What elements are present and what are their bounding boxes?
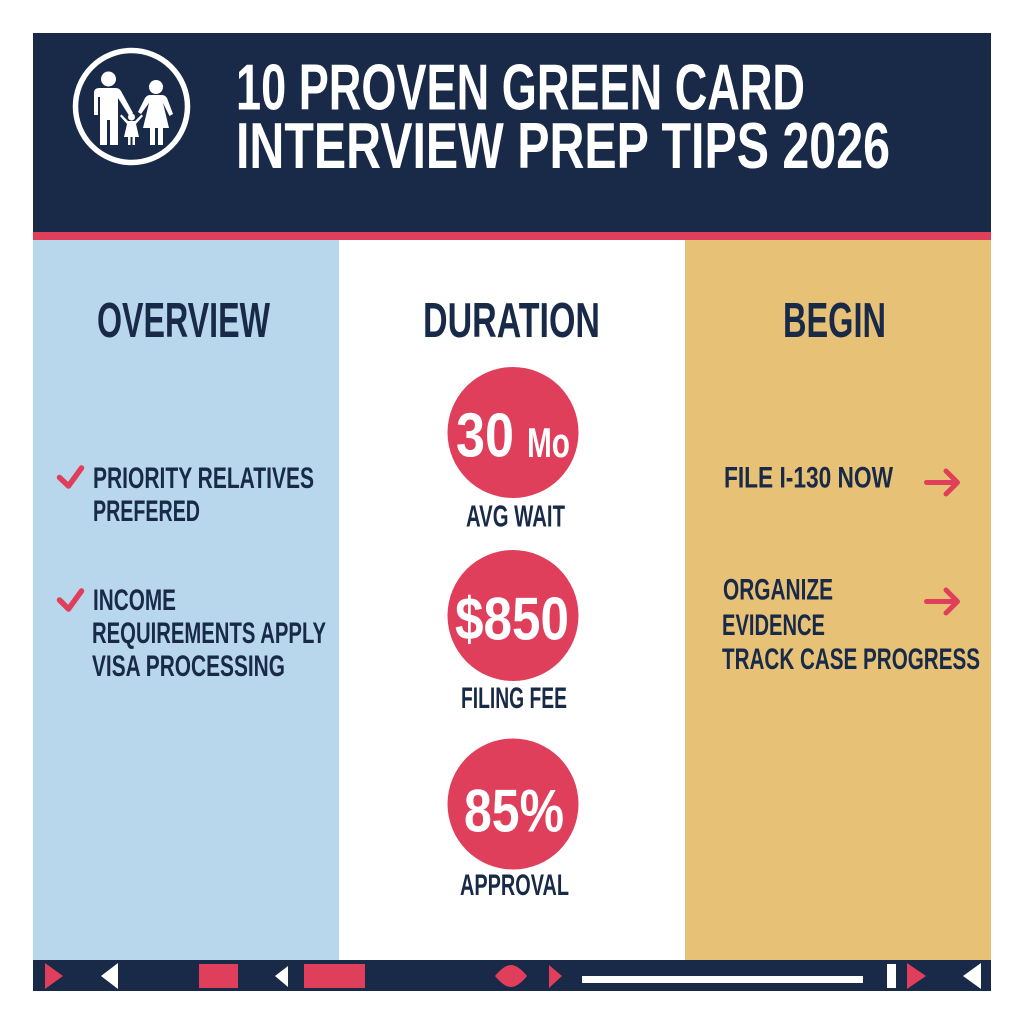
text: income requirements: REQUIREMENTS APPLY [92,617,326,650]
stat: average wait [448,367,578,534]
icon: check mark 2 [60,591,82,609]
icon: check mark 1 [60,468,82,486]
footer shapes [45,963,981,989]
heading: duration: DURATION [423,294,600,348]
text: organize evidence: ORGANIZE [723,574,833,606]
heading: begin: BEGIN [783,294,886,348]
icon: family in circle [76,50,188,162]
footer bar [33,960,991,991]
text: priority relatives: PRIORITY RELATIVES [93,462,314,495]
text: organize evidence [722,574,980,676]
text: income requirements: VISA PROCESSING [92,650,285,683]
stat: average wait: AVG WAIT [466,498,565,534]
text: priority relatives [93,462,314,528]
stat: filing fee [448,550,578,715]
text: income requirements [92,584,326,683]
text: organize evidence: EVIDENCE [722,609,825,642]
stat: average wait: Mo [527,419,570,466]
stat: filing fee: FILING FEE [461,682,567,715]
stat: approval: APPROVAL [460,869,569,902]
arrow 1 [926,471,958,494]
header banner [33,33,991,240]
stat: approval [448,738,578,902]
arrow 2 [926,590,958,613]
heading: overview: OVERVIEW [97,294,270,348]
panel: begin [685,240,991,960]
panel: duration [339,240,685,960]
text: priority relatives: PREFERED [93,495,200,528]
stat: filing fee: $850 [455,586,569,652]
text: income requirements: INCOME [93,584,176,617]
stat: average wait: 30 [456,402,514,470]
text: file i-130 now: FILE I-130 NOW [724,462,894,494]
title [236,50,890,182]
panel: overview [33,240,339,960]
stat: approval: 85% [464,778,564,844]
